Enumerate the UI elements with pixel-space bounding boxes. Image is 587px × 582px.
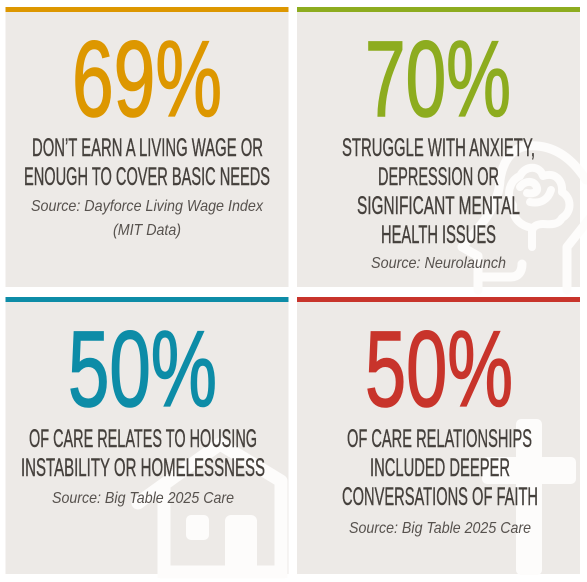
heading: anxiety [342, 134, 535, 249]
panel: 50 percent housing [6, 297, 288, 578]
panel: 69 percent living wage [6, 7, 288, 287]
source: Dayforce: Source: Dayforce Living Wage Index [31, 198, 264, 215]
stat: 70%: 70% [365, 18, 511, 139]
heading: living wage [24, 134, 270, 191]
heading: living wage: ENOUGH TO COVER BASIC NEEDS [24, 163, 270, 191]
icon: head with brain [462, 146, 587, 290]
source: Dayforce: (MIT Data) [113, 222, 181, 239]
heading: anxiety: HEALTH ISSUES [381, 221, 496, 249]
heading: housing [21, 425, 265, 482]
source: Big Table: Source: Big Table 2025 Care [52, 490, 234, 507]
stat: 50%: 50% [68, 308, 217, 429]
heading: living wage: DON’T EARN A LIVING WAGE OR [32, 134, 263, 162]
panel: 70 percent mental health [297, 7, 587, 290]
icon: house [132, 444, 285, 578]
source: Big Table: Source: Big Table 2025 Care [349, 520, 531, 537]
heading: housing: INSTABILITY OR HOMELESSNESS [21, 454, 265, 482]
heading: anxiety: DEPRESSION OR [378, 163, 499, 191]
source: Dayforce [31, 198, 264, 239]
heading: faith [342, 425, 538, 511]
stat: 69%: 69% [72, 18, 222, 139]
panel: 50 percent faith [297, 297, 580, 575]
source: Neurolaunch: Source: Neurolaunch [371, 255, 506, 272]
heading: housing: OF CARE RELATES TO HOUSING [29, 425, 257, 453]
icon: cross [482, 419, 576, 575]
stat: 50%: 50% [365, 308, 513, 429]
